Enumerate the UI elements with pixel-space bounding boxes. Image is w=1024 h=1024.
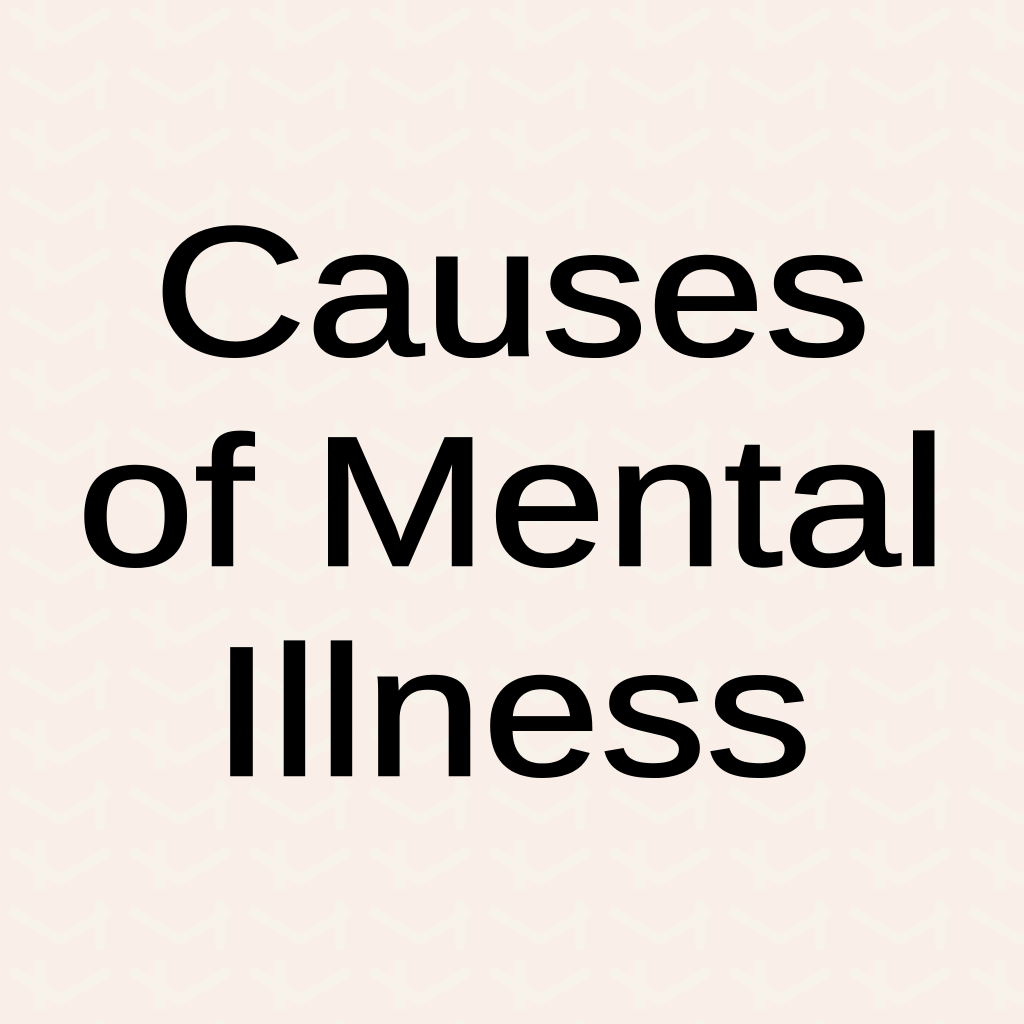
title: Causes bbox=[153, 188, 871, 394]
title: Illness bbox=[212, 608, 812, 814]
title bbox=[77, 188, 947, 814]
title: of Mental bbox=[77, 398, 947, 604]
